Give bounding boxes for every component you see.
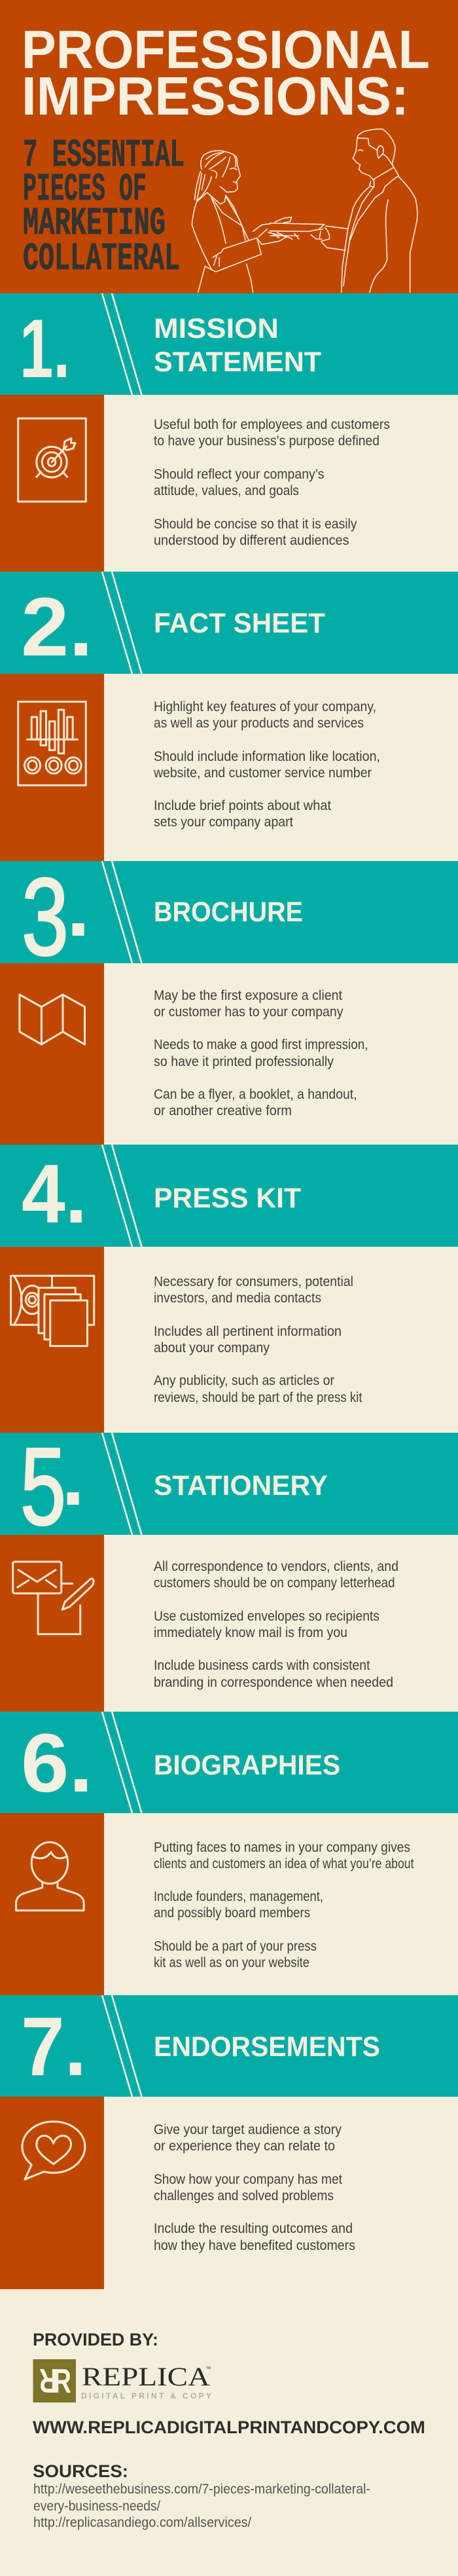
text block: section 3 points: or customer has to your company [154, 1004, 344, 1020]
subtitle: PIECES OF [23, 168, 147, 212]
illustration: two professionals exchanging a document [192, 129, 417, 293]
text block: source links: every-business-needs/ [33, 2499, 160, 2514]
heading: press kit: PRESS KIT [154, 1183, 301, 1214]
text block: section 6 points: Include founders, management, [154, 1889, 323, 1904]
text block: section 5 points: Use customized envelopes so recipients [154, 1609, 379, 1624]
banner: section 3 heading [0, 855, 458, 978]
icon: person bust [16, 1842, 84, 1911]
icon: envelope, letter and pen [13, 1562, 94, 1634]
text block: section 3 points: May be the first exposure a client [154, 988, 342, 1003]
text block: section 2 points [153, 699, 380, 830]
banner: section 1 heading [0, 293, 458, 395]
number 5: 5 [20, 1425, 66, 1548]
logo: Replica Digital Print & Copy: DIGITAL PRINT & COPY [81, 2391, 211, 2401]
website address: WWW.REPLICADIGITALPRINTANDCOPY.COM [33, 2418, 425, 2437]
text block: source links: http://replicasandiego.com/allservices/ [33, 2515, 251, 2530]
subtitle: 7 ESSENTIAL [23, 134, 185, 177]
text block: section 4 points: Any publicity, such as articles or [154, 1373, 334, 1388]
panel: section 4 icon column [0, 1247, 104, 1433]
text block: section 1 points: attitude, values, and goals [154, 483, 299, 498]
text block: section 4 points: Necessary for consumers, potential [154, 1274, 353, 1289]
text block: section 2 points: Include brief points about what [154, 798, 331, 813]
number 5: . [62, 1429, 84, 1522]
number 1: 1. [20, 302, 70, 395]
text block: section 5 points: customers should be on company letterhead [154, 1575, 395, 1591]
text block: section 7 points: or experience they can relate to [154, 2139, 335, 2154]
text block: section 7 points: Show how your company has met [154, 2172, 342, 2187]
text block: section 7 points: Give your target audience a story [154, 2122, 342, 2137]
header panel [0, 0, 458, 293]
text block: section 6 points: clients and customers an idea of what you’re about [154, 1856, 414, 1871]
banner: section 6 heading [0, 1712, 458, 1813]
text block: section 5 points: immediately know mail is from you [154, 1625, 347, 1640]
icon: charts sheet [18, 702, 86, 785]
icon: target with arrow [18, 418, 86, 502]
number 3: 3 [22, 855, 69, 978]
panel: section 2 icon column [0, 674, 104, 861]
number 7: 7. [21, 2000, 86, 2093]
text block: source links [33, 2482, 370, 2530]
number 3: . [67, 860, 90, 953]
text block: section 4 points: about your company [154, 1340, 270, 1355]
heading: mission statement: STATEMENT [154, 346, 321, 378]
text block: section 4 points: investors, and media contacts [154, 1291, 321, 1306]
banner: section 5 heading [0, 1425, 458, 1548]
number 2: 2. [21, 580, 93, 673]
heading: endorsements: ENDORSEMENTS [154, 2031, 380, 2063]
text block: section 2 points: sets your company apart [154, 815, 293, 830]
text block: section 6 points [154, 1840, 414, 1970]
text block: section 1 points: Useful both for employees and customers [154, 417, 390, 432]
panel: section 7 icon column [0, 2097, 104, 2289]
title [22, 19, 430, 126]
text block: section 7 points [154, 2122, 355, 2253]
section 3: brochure [0, 855, 458, 1145]
text block: section 6 points: Should be a part of your press [154, 1939, 317, 1954]
logo: Replica Digital Print & Copy: REPLICA [82, 2362, 210, 2391]
section 6: biographies [0, 1712, 458, 1995]
text block: section 3 points: so have it printed professionally [154, 1054, 334, 1069]
text block: section 6 points: kit as well as on your website [154, 1955, 309, 1970]
panel: section 1 icon column [0, 395, 104, 572]
heading: sources: SOURCES: [33, 2461, 128, 2481]
logo: Replica Digital Print & Copy [33, 2359, 211, 2402]
panel: section 3 icon column [0, 963, 104, 1145]
heading: mission statement: MISSION [154, 313, 279, 344]
text block: section 2 points: website, and customer service number [153, 765, 372, 781]
text block: section 5 points: branding in correspondence when needed [154, 1675, 393, 1690]
text block: section 1 points: Should be concise so that it is easily [154, 517, 357, 532]
panel: section 6 icon column [0, 1813, 104, 1995]
text block: section 2 points: as well as your products and services [154, 716, 364, 731]
logo: Replica Digital Print & Copy: R [39, 2361, 58, 2399]
text block: section 3 points: Needs to make a good first impression, [154, 1037, 368, 1052]
logo: Replica Digital Print & Copy: R [53, 2363, 71, 2401]
banner: section 7 heading [0, 1995, 458, 2097]
text block: section 6 points: and possibly board members [154, 1905, 310, 1921]
heading: fact sheet: FACT SHEET [154, 608, 325, 639]
banner: section 4 heading [0, 1145, 458, 1247]
text block: section 7 points: challenges and solved problems [154, 2188, 334, 2203]
text block: section 5 points [154, 1559, 398, 1690]
text block: section 1 points: understood by different audiences [154, 533, 349, 548]
banner: section 2 heading [0, 572, 458, 674]
section 4: press kit [0, 1145, 458, 1433]
text block: source links: http://weseethebusiness.com/7-pieces-marketing-collateral- [33, 2482, 370, 2497]
title: PROFESSIONAL [22, 19, 430, 80]
footer panel [33, 2330, 425, 2530]
subtitle [23, 134, 185, 281]
text block: section 5 points: Include business cards with consistent [154, 1658, 370, 1673]
text block: section 3 points: Can be a flyer, a booklet, a handout, [154, 1087, 357, 1102]
text block: section 3 points: or another creative form [154, 1103, 292, 1118]
section 7: endorsements [0, 1995, 458, 2289]
text block: section 6 points: Putting faces to names in your company gives [154, 1840, 410, 1855]
icon: folded brochure [20, 995, 84, 1044]
number 6: 6. [21, 1716, 93, 1809]
text block: section 2 points: Should include information like location, [154, 749, 380, 764]
icon: press kit folder with disc and pages [11, 1276, 94, 1346]
panel: section 5 icon column [0, 1535, 104, 1712]
section 2: fact sheet [0, 572, 458, 861]
text block: section 7 points: Include the resulting outcomes and [154, 2221, 353, 2236]
text block: section 1 points [154, 417, 390, 548]
heading: stationery: STATIONERY [154, 1470, 328, 1501]
text block: section 1 points: to have your business’s purpose defined [154, 433, 379, 449]
text block: section 4 points: reviews, should be part of the press kit [154, 1390, 362, 1405]
number 4: 4. [22, 1147, 87, 1240]
text block: section 3 points [154, 988, 368, 1118]
heading: provided by: PROVIDED BY: [33, 2330, 158, 2349]
subtitle: COLLATERAL [23, 237, 180, 281]
text block: section 1 points: Should reflect your company’s [154, 467, 325, 482]
heading: biographies: BIOGRAPHIES [154, 1750, 340, 1781]
title: IMPRESSIONS: [22, 65, 409, 126]
text block: section 2 points: Highlight key features of your company, [154, 699, 376, 714]
text block: section 5 points: All correspondence to vendors, clients, and [154, 1559, 398, 1574]
section 1: mission statement [0, 293, 458, 572]
section 5: stationery [0, 1425, 458, 1712]
heading: brochure: BROCHURE [154, 896, 303, 928]
heading: mission statement [154, 313, 321, 378]
text block: section 4 points: Includes all pertinent information [154, 1324, 342, 1339]
icon: speech bubble with heart [22, 2122, 85, 2179]
text block: section 4 points [154, 1274, 362, 1405]
text block: section 7 points: how they have benefited customers [154, 2238, 355, 2253]
logo: Replica Digital Print & Copy: TM [206, 2366, 211, 2370]
subtitle: MARKETING [23, 202, 166, 246]
